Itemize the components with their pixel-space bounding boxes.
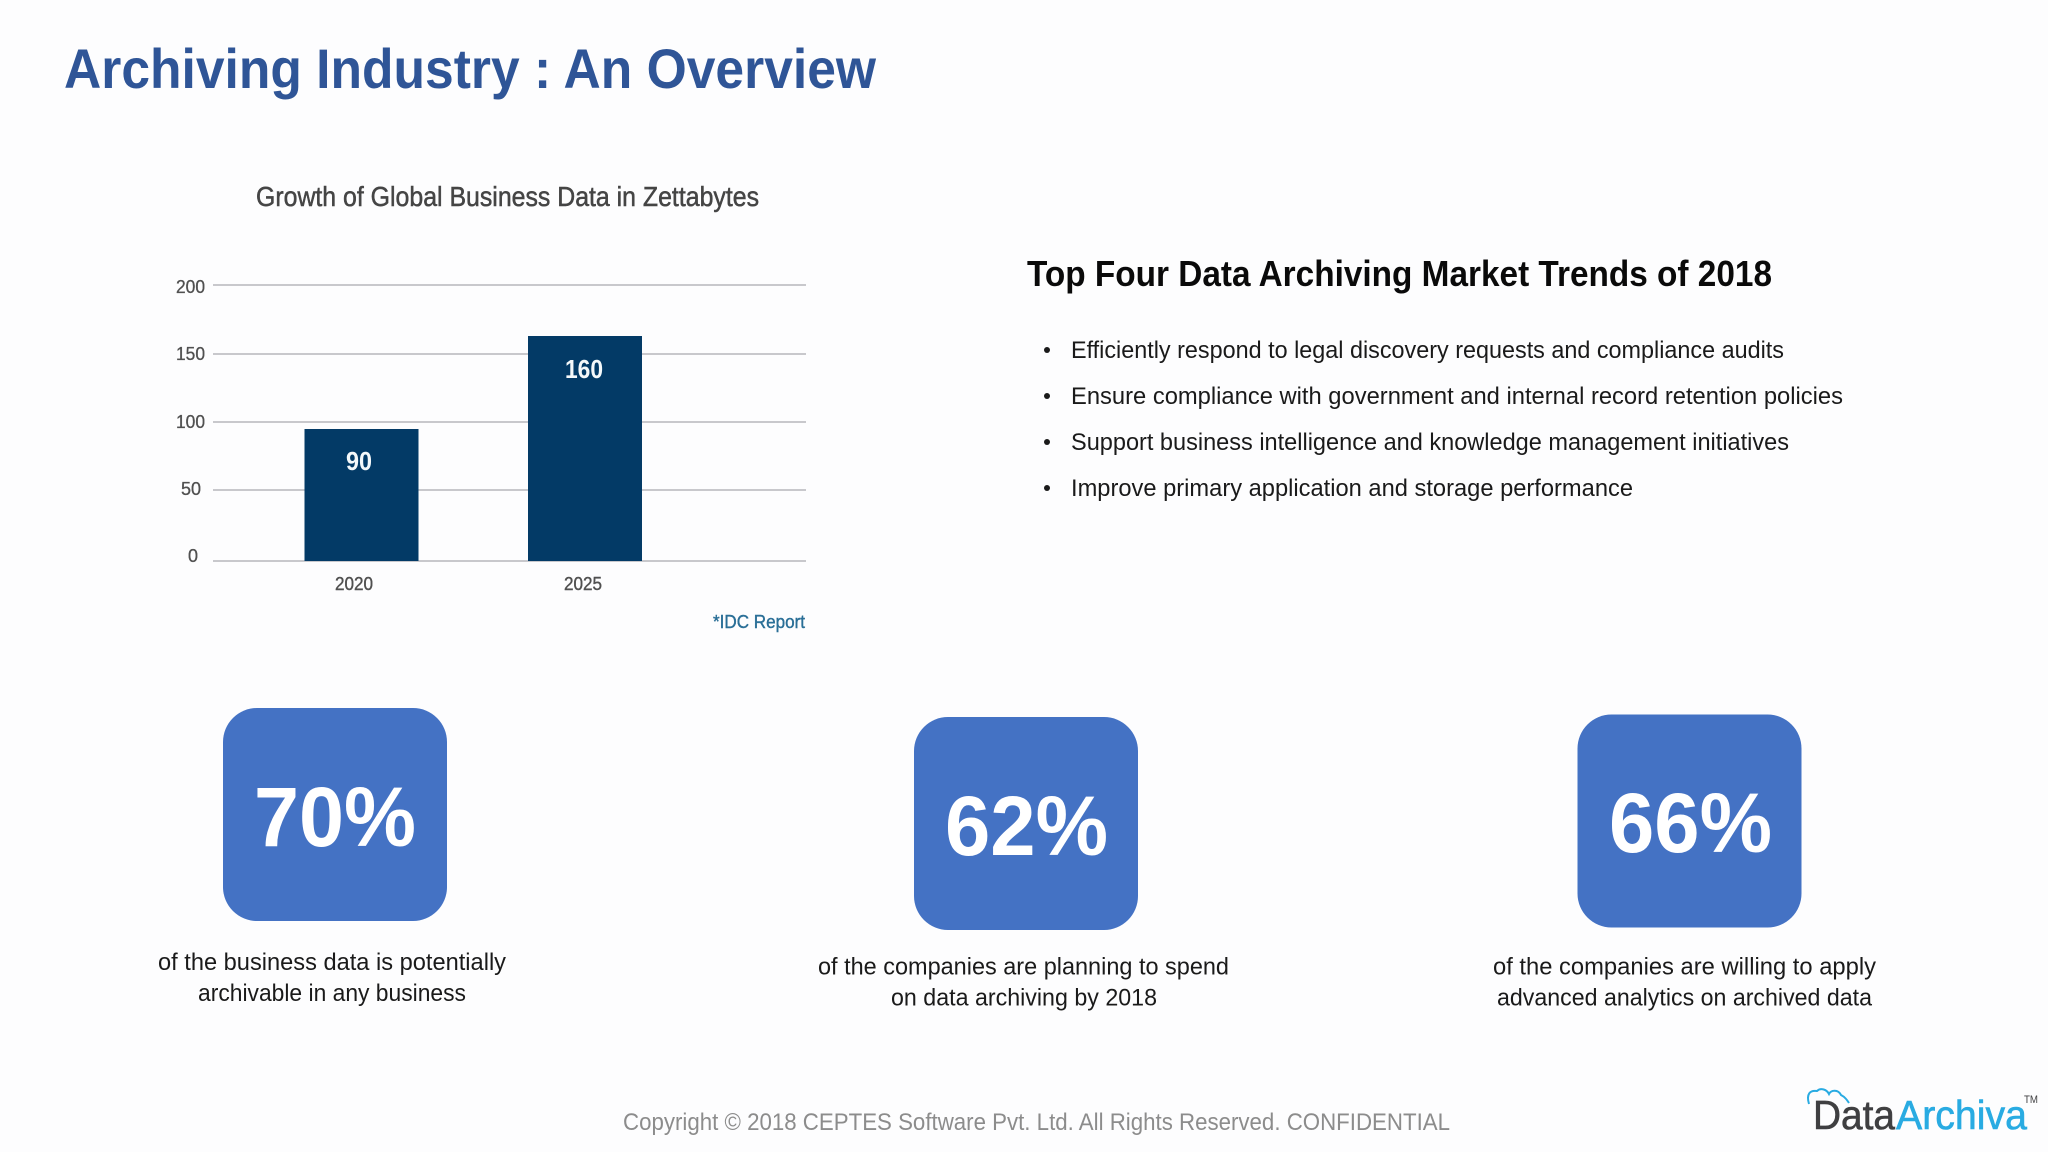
logo: DataArchiva: TM	[2024, 1094, 2038, 1106]
y-axis labels: 50	[181, 479, 201, 499]
stat card: 70%: of the business data is potentially	[158, 949, 507, 976]
stat card: 62%	[818, 717, 1229, 1012]
market trends panel	[1027, 253, 1843, 502]
title: Archiving Industry : An Overview	[64, 37, 876, 100]
y-axis labels: 0	[188, 546, 198, 566]
footer copyright: Copyright © 2018 CEPTES Software Pvt. Ltd. All Rights Reserved. CONFIDENTIAL	[623, 1109, 1450, 1136]
bar: 2020 value 90: 90	[346, 446, 372, 476]
bullet list: Support business intelligence and knowledge management initiatives	[1071, 429, 1789, 456]
stat card: 70%: archivable in any business	[198, 980, 466, 1007]
x-axis labels: 2020	[335, 574, 373, 594]
stat card: 66%: advanced analytics on archived data	[1497, 984, 1872, 1012]
bullet list: Ensure compliance with government and internal record retention policies	[1071, 383, 1843, 410]
logo: DataArchiva: Data	[1813, 1092, 1895, 1138]
bar chart: growth of global business data	[176, 181, 806, 632]
bar: 2020 value 90	[304, 429, 418, 561]
stat card: 62%: on data archiving by 2018	[891, 984, 1157, 1012]
x-axis labels: 2025	[564, 574, 602, 594]
gridlines	[213, 285, 806, 561]
y-axis labels: 150	[176, 344, 205, 364]
logo: DataArchiva: Archiva	[1896, 1092, 2027, 1138]
y-axis labels	[176, 277, 205, 566]
stat card: 70%	[158, 708, 507, 1007]
logo: DataArchiva	[1808, 1089, 2038, 1138]
bullet list: Efficiently respond to legal discovery requests and compliance audits	[1071, 337, 1784, 364]
trends heading: Top Four Data Archiving Market Trends of 2018	[1027, 253, 1772, 294]
bullet list: Improve primary application and storage performance	[1071, 475, 1633, 502]
stat card: 66%: of the companies are willing to apply	[1493, 954, 1877, 980]
stat card: 66%: 66%	[1609, 776, 1772, 870]
stat card: 70%: 70%	[254, 770, 416, 864]
stat card: 66%	[1493, 714, 1877, 1012]
source note: *IDC Report	[713, 612, 805, 632]
stat card: 62%: of the companies are planning to spend	[818, 954, 1229, 980]
y-axis labels: 200	[176, 277, 205, 297]
stat card: 62%: 62%	[945, 779, 1108, 873]
chart title: Growth of Global Business Data in Zettabytes	[256, 181, 759, 212]
bar: 2025 value 160	[528, 336, 642, 561]
bar: 2025 value 160: 160	[565, 354, 603, 384]
bullet list	[1044, 337, 1843, 502]
y-axis labels: 100	[176, 412, 205, 432]
x-axis labels	[335, 574, 602, 594]
